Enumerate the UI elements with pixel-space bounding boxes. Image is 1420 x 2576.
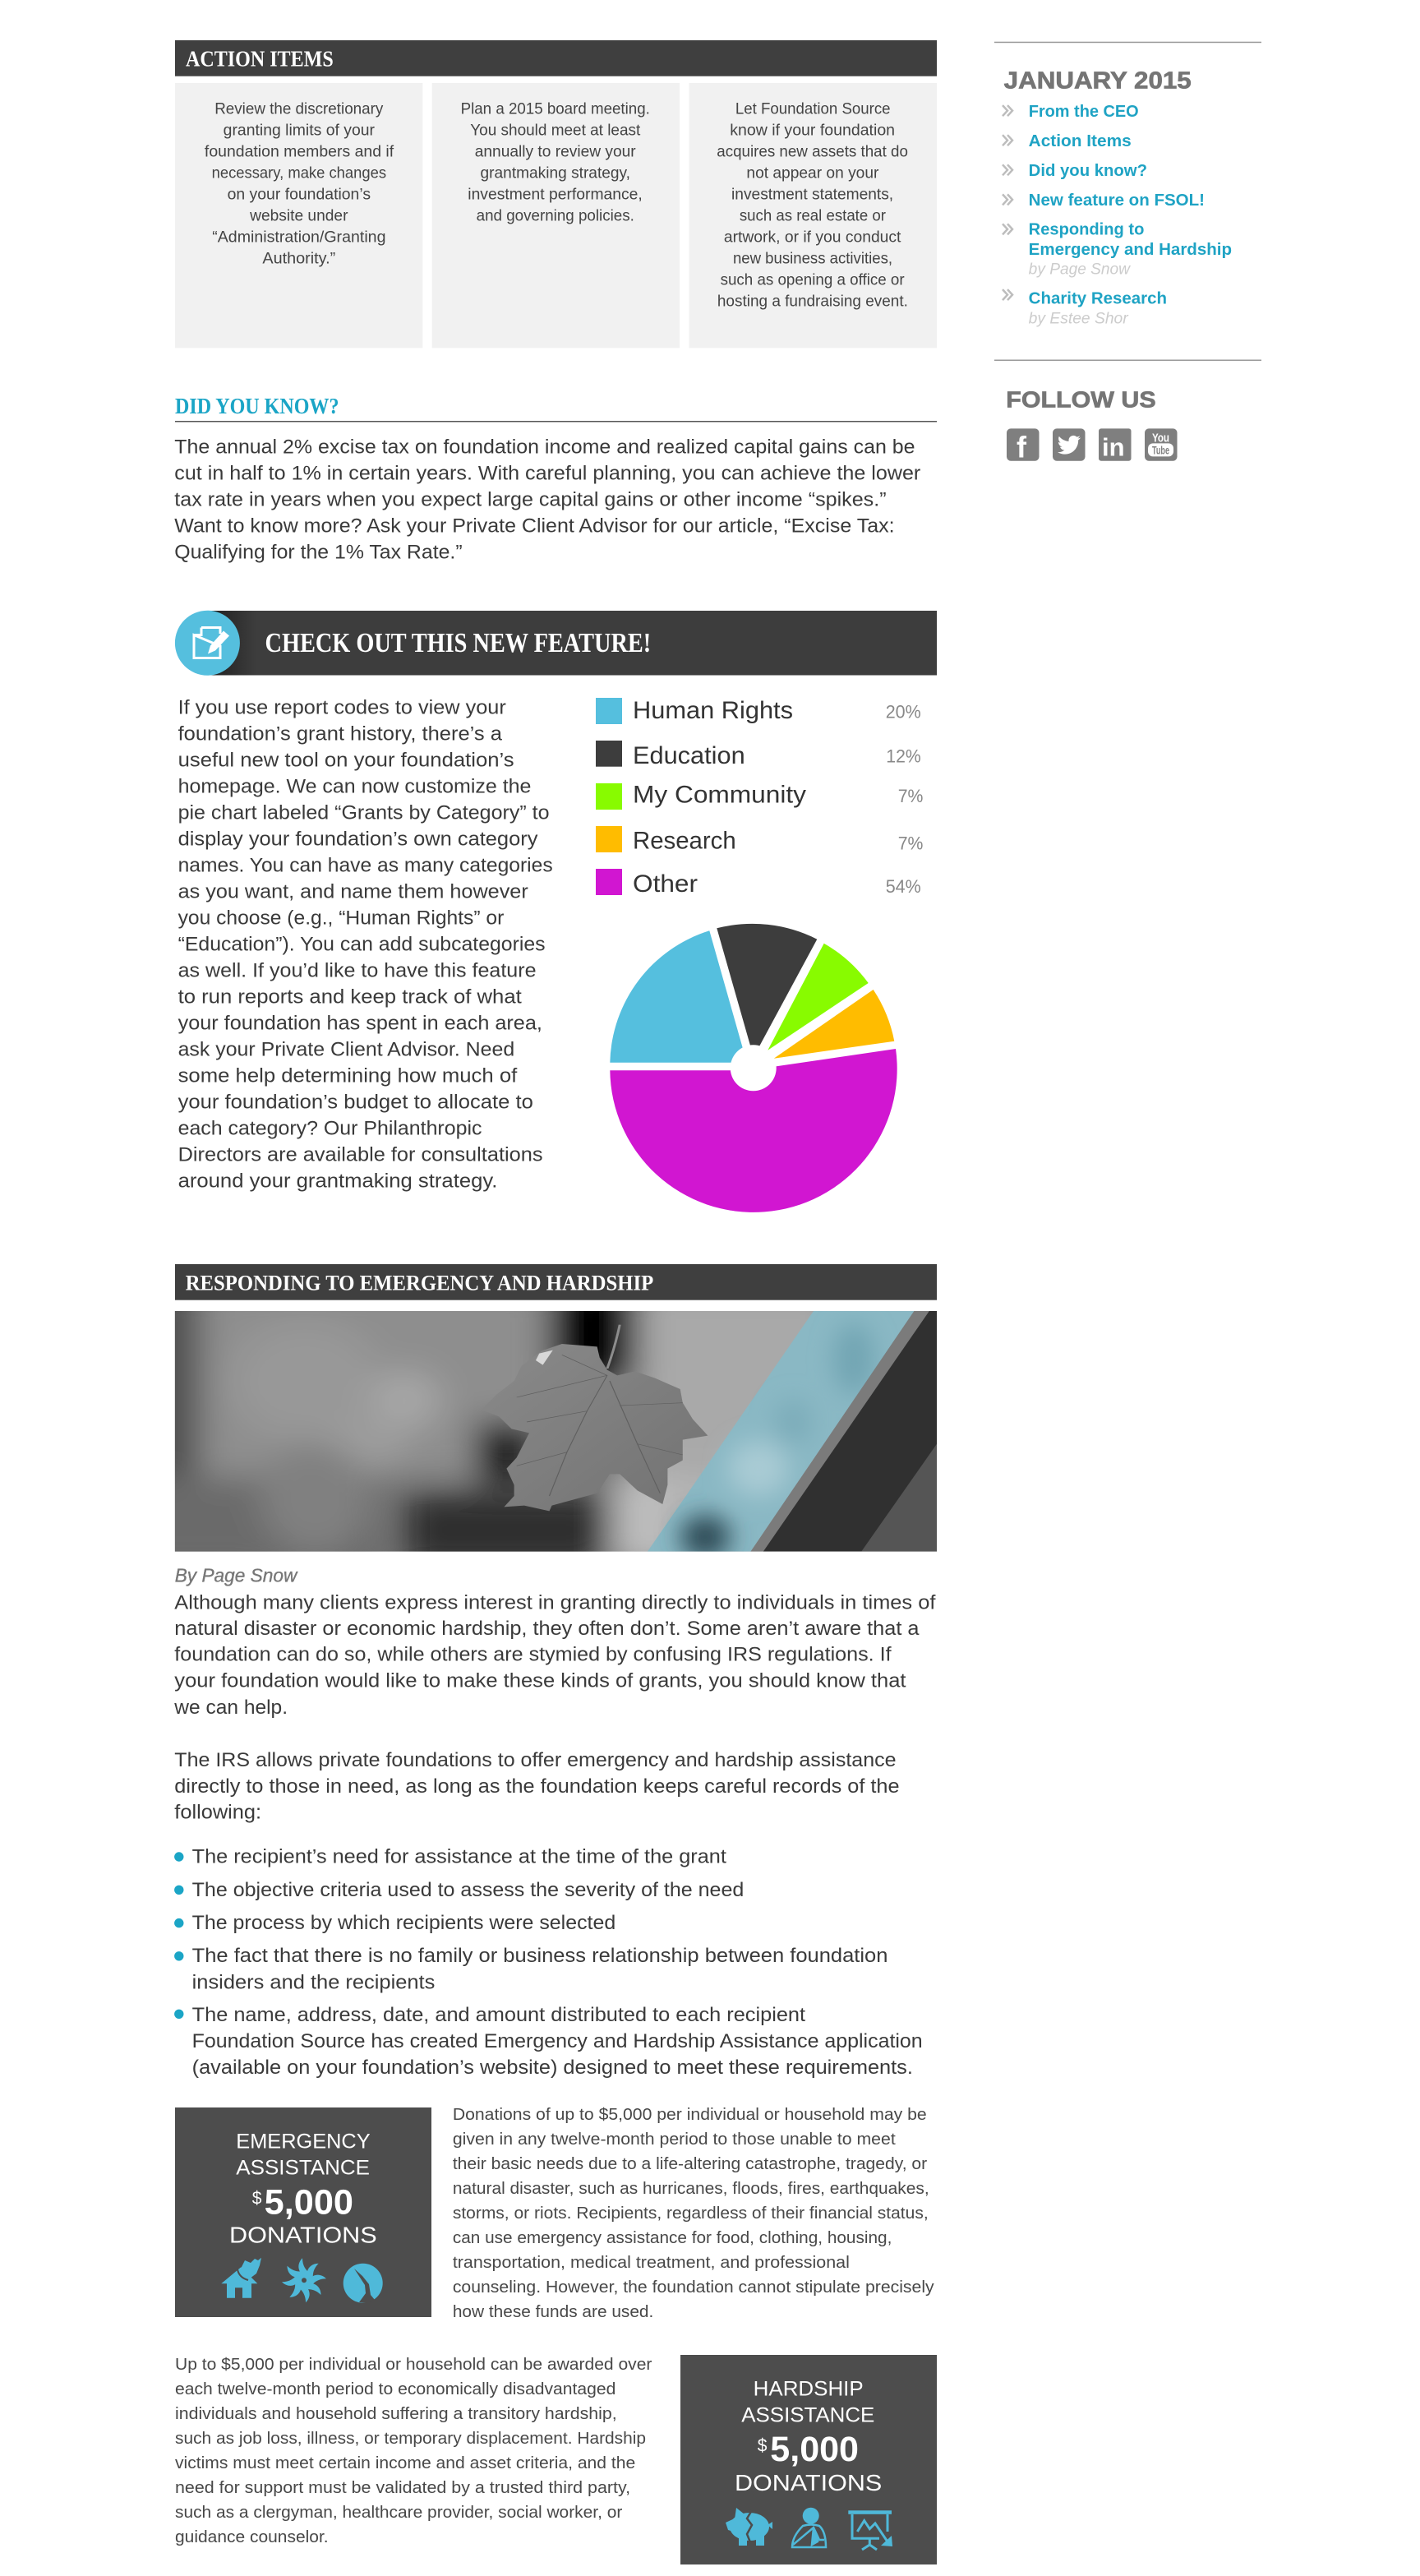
text block: IRS rules: The IRS allows private foundations to offer emergency and hardship assistance xyxy=(174,1749,897,1771)
icon: document with pencil xyxy=(175,611,240,676)
text block: report codes: display your foundation’s own category xyxy=(178,828,537,850)
text block: report codes: you choose (e.g., “Human Rights” or xyxy=(178,907,504,930)
icon: linkedin: in xyxy=(1102,432,1125,461)
text block: report codes: pie chart labeled “Grants by Category” to xyxy=(178,801,549,824)
text block: IRS rules: following: xyxy=(174,1802,261,1824)
callout: emergency assistance: ASSISTANCE xyxy=(236,2157,370,2180)
card: board meeting: and governing policies. xyxy=(477,207,634,224)
icon: falling chart presentation xyxy=(848,2510,892,2550)
text block: emergency donations: transportation, medical treatment, and professional xyxy=(453,2253,850,2272)
callout: hardship assistance: DONATIONS xyxy=(735,2470,882,2495)
callout: emergency assistance: 5,000 xyxy=(265,2182,353,2222)
callout: hardship assistance: 5,000 xyxy=(770,2430,859,2469)
card: new assets: know if your foundation xyxy=(730,122,895,139)
text block: report codes: names. You can have as many categories xyxy=(178,854,553,877)
legend: grants by category: 7% xyxy=(898,833,923,853)
text block: emergency donations: their basic needs due to a life-altering catastrophe, tragedy, or xyxy=(453,2154,927,2173)
pie chart xyxy=(610,924,897,1212)
text block: hardship donations: each twelve-month period to economically disadvantaged xyxy=(175,2380,615,2398)
bullet list: records: (available on your foundation’s website) designed to meet these requirements. xyxy=(192,2057,913,2079)
text block: hardship donations xyxy=(175,2355,652,2546)
card: board meeting: Plan a 2015 board meeting. xyxy=(461,100,650,118)
icon: earthquake xyxy=(343,2264,383,2303)
card: new assets: new business activities, xyxy=(733,250,892,267)
callout: hardship assistance: $ xyxy=(758,2435,767,2456)
text block: report codes: homepage. We can now customize the xyxy=(178,775,531,797)
text block: IRS rules: directly to those in need, as long as the foundation keeps careful records of the xyxy=(174,1775,900,1798)
card: discretionary limits: granting limits of your xyxy=(224,122,375,139)
callout: emergency assistance xyxy=(175,2107,431,2317)
callout: hardship assistance xyxy=(680,2355,937,2564)
list: contents: Charity Research xyxy=(1029,290,1167,308)
callout: emergency assistance: DONATIONS xyxy=(229,2222,377,2247)
heading: january 2015: JANUARY 2015 xyxy=(1004,67,1192,94)
text block: report codes xyxy=(178,696,553,1193)
legend: grants by category xyxy=(596,697,923,898)
text block: intro: natural disaster or economic hardship, they often don’t. Some aren’t aware that a xyxy=(174,1618,920,1640)
icon: facebook xyxy=(1007,428,1039,464)
heading: did you know: DID YOU KNOW? xyxy=(175,394,339,418)
bullet list: records xyxy=(174,1846,923,2079)
list: contents: New feature on FSOL! xyxy=(1029,192,1205,210)
text block: report codes: If you use report codes to view your xyxy=(178,696,506,718)
text block: emergency donations: can use emergency assistance for food, clothing, housing, xyxy=(453,2228,892,2247)
bullet list: records: The process by which recipients were selected xyxy=(192,1912,615,1934)
card: board meeting: grantmaking strategy, xyxy=(481,164,630,182)
list: contents: From the CEO xyxy=(1029,103,1139,121)
bullet list: records: insiders and the recipients xyxy=(192,1971,435,1993)
text block: report codes: “Education”). You can add subcategories xyxy=(178,933,546,956)
text block: intro: foundation can do so, while others are stymied by confusing IRS regulations. If xyxy=(174,1644,892,1666)
text block: report codes: some help determining how much of xyxy=(178,1065,518,1087)
text block: excise tax: The annual 2% excise tax on foundation income and realized capital gains can be xyxy=(174,436,915,458)
bullet list: records: The fact that there is no family or business relationship between foundation xyxy=(192,1945,888,1967)
legend: grants by category: Research xyxy=(633,827,736,854)
text block: excise tax xyxy=(174,436,920,564)
text block: report codes: to run reports and keep track of what xyxy=(178,986,522,1009)
text block: report codes: as you want, and name them however xyxy=(178,880,528,903)
card: board meeting: You should meet at least xyxy=(470,122,641,139)
panel: responding to emergency and hardship xyxy=(134,1264,937,2564)
panel: sidebar xyxy=(994,42,1261,464)
bullet list: records: Foundation Source has created Emergency and Hardship Assistance application xyxy=(192,2030,923,2052)
card: discretionary limits: website under xyxy=(249,207,348,224)
icon: facebook: f xyxy=(1017,430,1027,464)
card: discretionary limits: Review the discretionary xyxy=(214,100,384,118)
card: new assets: such as real estate or xyxy=(740,207,886,224)
text block: hardship donations: guidance counselor. xyxy=(175,2528,329,2546)
card: new assets: investment statements, xyxy=(731,186,893,203)
callout: hardship assistance: ASSISTANCE xyxy=(741,2404,874,2427)
text block: emergency donations xyxy=(453,2105,934,2321)
callout: emergency assistance: $ xyxy=(252,2188,261,2209)
text block: emergency donations: how these funds are used. xyxy=(453,2302,653,2321)
heading: check out this new feature: CHECK OUT THIS NEW FEATURE! xyxy=(265,628,651,658)
card: new assets xyxy=(689,83,937,348)
heading: responding xyxy=(175,1264,937,1300)
list: contents: Responding to xyxy=(1029,221,1144,239)
legend: grants by category: Education xyxy=(633,742,745,769)
card: new assets: not appear on your xyxy=(746,164,878,182)
text block: emergency donations: Donations of up to $5,000 per individual or household may be xyxy=(453,2105,927,2124)
icon: hurricane xyxy=(282,2258,326,2302)
text block: report codes: ask your Private Client Advisor. Need xyxy=(178,1039,514,1061)
text block: report codes: each category? Our Philanthropic xyxy=(178,1118,482,1140)
card: discretionary limits: “Administration/Granting xyxy=(212,229,385,246)
heading: responding: RESPONDING TO EMERGENCY AND HARDSHIP xyxy=(186,1271,653,1295)
text block: report codes: foundation’s grant history, there’s a xyxy=(178,722,503,745)
icon: youtube xyxy=(1145,428,1177,461)
text block: report codes: your foundation has spent in each area, xyxy=(178,1013,542,1035)
text block: hardship donations: need for support must be validated by a trusted third party, xyxy=(175,2478,630,2497)
list: contents: Emergency and Hardship xyxy=(1029,241,1232,259)
list: contents: Action Items xyxy=(1029,132,1132,150)
list: contents: by Estee Shor xyxy=(1029,311,1128,328)
newsletter page xyxy=(174,40,1261,2564)
panel: action items xyxy=(175,40,937,348)
byline: By Page Snow xyxy=(175,1565,298,1586)
text block: report codes: useful new tool on your foundation’s xyxy=(178,749,514,771)
heading: action items: ACTION ITEMS xyxy=(186,47,334,72)
heading: follow us: FOLLOW US xyxy=(1006,386,1156,413)
callout: emergency assistance: EMERGENCY xyxy=(236,2130,371,2153)
card: new assets: Let Foundation Source xyxy=(735,100,891,118)
legend: grants by category: 20% xyxy=(886,702,921,722)
text block: hardship donations: such as job loss, illness, or temporary displacement. Hardship xyxy=(175,2429,646,2448)
card: new assets: acquires new assets that do xyxy=(717,143,908,160)
card: board meeting: annually to review your xyxy=(475,143,636,160)
icon: youtube: You xyxy=(1152,431,1169,445)
list: contents: Did you know? xyxy=(1029,162,1147,180)
text block: excise tax: Qualifying for the 1% Tax Rate.” xyxy=(174,541,463,564)
text block: emergency donations: given in any twelve-month period to those unable to meet xyxy=(453,2130,896,2149)
card: discretionary limits: Authority.” xyxy=(262,250,335,267)
text block: intro: we can help. xyxy=(173,1697,288,1719)
card: new assets: artwork, or if you conduct xyxy=(724,229,901,246)
panel: did you know xyxy=(174,394,937,564)
text block: emergency donations: natural disaster, such as hurricanes, floods, fires, earthquakes, xyxy=(453,2179,929,2198)
text block: intro xyxy=(173,1591,936,1719)
text block: report codes: Directors are available for consultations xyxy=(178,1144,543,1166)
card: discretionary limits xyxy=(175,83,422,348)
legend: grants by category: My Community xyxy=(633,782,806,809)
text block: emergency donations: storms, or riots. Recipients, regardless of their financial status, xyxy=(453,2204,929,2223)
card: discretionary limits: necessary, make changes xyxy=(212,164,386,182)
card: new assets: such as opening a office or xyxy=(721,271,905,289)
text block: hardship donations: such as a clergyman, healthcare provider, social worker, or xyxy=(175,2503,623,2522)
text block: excise tax: tax rate in years when you expect large capital gains or other income “spikes.” xyxy=(174,488,887,511)
icon: broken piggy bank xyxy=(726,2508,772,2546)
text block: hardship donations: victims must meet certain income and asset criteria, and the xyxy=(175,2454,635,2472)
card: new assets: hosting a fundraising event. xyxy=(717,293,908,310)
legend: grants by category: Other xyxy=(633,870,698,898)
icon: person with sling xyxy=(792,2508,826,2547)
text block: hardship donations: individuals and household suffering a transitory hardship, xyxy=(175,2404,617,2423)
photo: falling leaf xyxy=(174,1311,937,1552)
list: contents: by Page Snow xyxy=(1029,261,1131,279)
text block: report codes: as well. If you’d like to have this feature xyxy=(178,960,537,982)
text block: intro: your foundation would like to make these kinds of grants, you should know that xyxy=(174,1670,906,1692)
text block: report codes: your foundation’s budget to allocate to xyxy=(178,1092,533,1114)
legend: grants by category: 7% xyxy=(898,786,923,806)
heading: check out this new feature xyxy=(207,611,937,676)
bullet list: records: The recipient’s need for assistance at the time of the grant xyxy=(192,1846,726,1868)
text block: excise tax: cut in half to 1% in certain years. With careful planning, you can achieve the lower xyxy=(174,462,920,485)
card: discretionary limits: on your foundation’s xyxy=(228,186,371,203)
legend: grants by category: 12% xyxy=(886,746,921,767)
bullet list: records: The objective criteria used to assess the severity of the need xyxy=(192,1879,744,1901)
icon: linkedin xyxy=(1099,428,1131,461)
card: discretionary limits: foundation members and if xyxy=(205,143,394,160)
text block: IRS rules xyxy=(174,1749,900,1824)
list: contents xyxy=(1003,103,1232,328)
text block: emergency donations: counseling. However, the foundation cannot stipulate precisely xyxy=(453,2278,934,2297)
text block: hardship donations: Up to $5,000 per individual or household can be awarded over xyxy=(175,2355,652,2374)
heading: action items xyxy=(175,40,937,76)
panel: new feature xyxy=(175,611,937,1212)
icon: twitter xyxy=(1053,428,1085,461)
bullet list: records: The name, address, date, and amount distributed to each recipient xyxy=(192,2004,805,2026)
text block: report codes: around your grantmaking strategy. xyxy=(178,1170,497,1193)
card: board meeting: investment performance, xyxy=(468,186,643,203)
icon: house on fire xyxy=(221,2258,261,2298)
legend: grants by category: 54% xyxy=(886,876,921,897)
text block: intro: Although many clients express interest in granting directly to individuals in times of xyxy=(174,1591,936,1613)
callout: hardship assistance: HARDSHIP xyxy=(754,2378,864,2401)
card: board meeting xyxy=(432,83,680,348)
text block: excise tax: Want to know more? Ask your Private Client Advisor for our article, “Excise Tax: xyxy=(174,515,895,538)
icon: youtube: Tube xyxy=(1152,443,1169,456)
legend: grants by category: Human Rights xyxy=(633,697,793,724)
